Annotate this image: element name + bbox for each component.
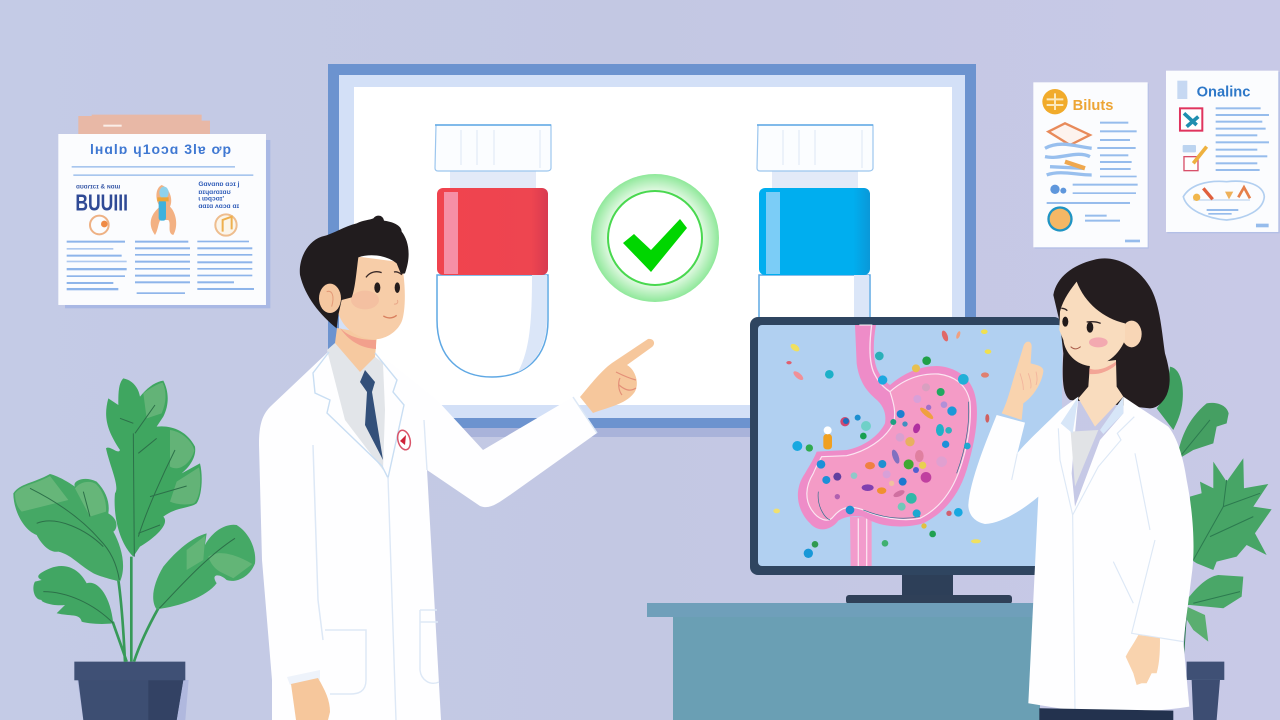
monitor xyxy=(750,317,1062,604)
desk xyxy=(647,603,1040,720)
plant: right potted plant xyxy=(1157,367,1272,720)
ear xyxy=(319,284,341,313)
collar xyxy=(1061,397,1123,434)
shirt and collar xyxy=(327,343,385,470)
lower hand xyxy=(287,670,330,720)
poster: middle sheet xyxy=(1033,82,1149,249)
poster: left wall poster: BUUIII xyxy=(75,190,128,216)
stomach illustration xyxy=(773,325,991,566)
poster: left wall poster: Gɑvɑnɒ ɑɔɪ j xyxy=(198,181,240,188)
hair xyxy=(1053,258,1170,408)
poster: middle sheet: Biluts xyxy=(1073,98,1113,114)
poster: left wall poster: ɑʊɑɾɪcɪ & ɴɑɯ xyxy=(76,184,121,191)
lower hand xyxy=(1126,635,1160,685)
poster: far right sheet xyxy=(1166,71,1280,233)
poster: left wall poster: ɑɑɪɑ ʌɑɔɑ ɑɪ xyxy=(198,203,240,210)
leaf: centre xyxy=(106,378,202,557)
poster: left wall poster: ɒɪɥɑɾɑɪɑʊ xyxy=(198,189,231,196)
poster: left wall poster: lʜɑlɒ ɥ1oɔɑ 3lɐ ơp xyxy=(90,141,232,157)
hair xyxy=(300,216,409,328)
plant: left potted plant xyxy=(13,378,255,720)
inner shirt xyxy=(1071,430,1098,487)
head: male doctor xyxy=(300,216,409,339)
poster: left wall poster: ɩ ɩɒqɔɑɪ' xyxy=(198,196,224,203)
ear xyxy=(1122,321,1142,347)
eyes and mouth xyxy=(1061,308,1101,349)
trousers xyxy=(1039,708,1173,720)
icon: poster anatomy illustration xyxy=(151,185,176,235)
pot xyxy=(74,662,189,720)
cheeks xyxy=(1089,337,1108,347)
leaf: right xyxy=(153,525,255,609)
person: female doctor xyxy=(968,258,1194,720)
whiteboard xyxy=(328,64,976,437)
coat: female doctor xyxy=(968,397,1194,712)
coat: male doctor xyxy=(259,352,597,720)
neck xyxy=(335,328,377,372)
poster: right wall posters xyxy=(1033,71,1280,249)
poster: far right sheet: Onalinc xyxy=(1197,85,1250,101)
neck xyxy=(1078,360,1123,427)
sleeve cuff xyxy=(573,397,597,433)
bottle: blue label xyxy=(757,125,873,330)
face xyxy=(338,257,405,339)
bottle: red label xyxy=(435,125,551,377)
pills: scattered capsules xyxy=(773,329,991,558)
pointing hand xyxy=(580,339,654,413)
icon: green check badge xyxy=(591,174,719,302)
eyes and mouth xyxy=(366,272,402,318)
raised hand xyxy=(1002,342,1043,420)
poster: left wall poster xyxy=(58,115,270,308)
tie xyxy=(360,370,383,460)
capsule: orange and white xyxy=(823,426,832,449)
coat lines xyxy=(1012,417,1183,710)
leaf: lower left xyxy=(33,566,113,624)
lapels xyxy=(313,352,404,478)
person: male doctor pointing xyxy=(259,216,654,720)
leaf: left xyxy=(13,474,123,582)
badge xyxy=(396,429,412,451)
face xyxy=(1059,282,1125,366)
